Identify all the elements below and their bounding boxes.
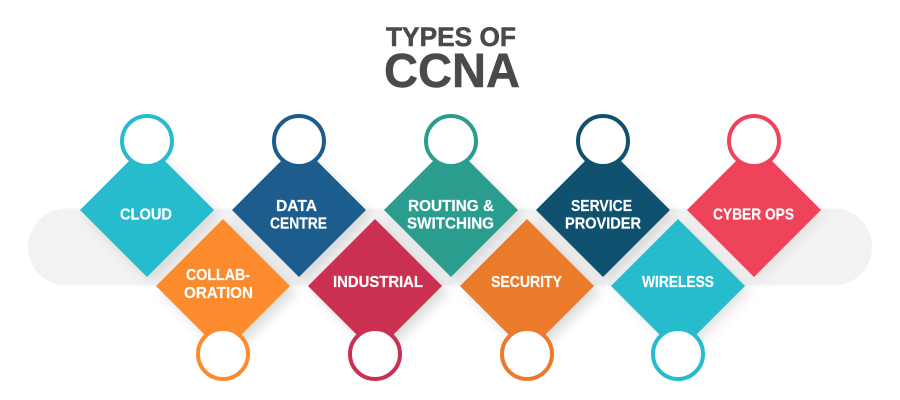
diamond: routing and switching: SWITCHING bbox=[407, 216, 494, 232]
diamond: industrial: INDUSTRIAL bbox=[333, 274, 423, 291]
diamond: service provider: SERVICE bbox=[571, 198, 632, 215]
diamond: service provider: PROVIDER bbox=[565, 216, 641, 232]
diamond: service provider bbox=[536, 116, 675, 282]
diamond: wireless bbox=[611, 219, 751, 379]
background band bbox=[28, 208, 872, 286]
diamond: collaboration: COLLAB- bbox=[186, 267, 250, 284]
title bbox=[384, 22, 520, 98]
diamond: industrial bbox=[308, 219, 448, 379]
diamond: security: SECURITY bbox=[491, 274, 562, 291]
title: CCNA bbox=[384, 45, 520, 98]
diamond: cloud bbox=[80, 116, 219, 282]
diamond: collaboration bbox=[156, 219, 296, 379]
diamond: routing and switching bbox=[384, 116, 523, 282]
diamond: wireless: WIRELESS bbox=[642, 274, 714, 291]
diamond: data centre: DATA bbox=[276, 198, 317, 215]
diamond: data centre: CENTRE bbox=[270, 216, 327, 232]
diamond: data centre bbox=[232, 116, 371, 282]
title: TYPES OF bbox=[386, 22, 516, 52]
diamond: cloud: CLOUD bbox=[120, 206, 172, 224]
diamond: security bbox=[460, 219, 600, 379]
diamond: routing and switching: ROUTING & bbox=[408, 198, 494, 215]
diamond: cyber ops bbox=[687, 116, 825, 281]
diamond: cyber ops: CYBER OPS bbox=[713, 206, 794, 224]
diamond: collaboration: ORATION bbox=[184, 285, 253, 302]
